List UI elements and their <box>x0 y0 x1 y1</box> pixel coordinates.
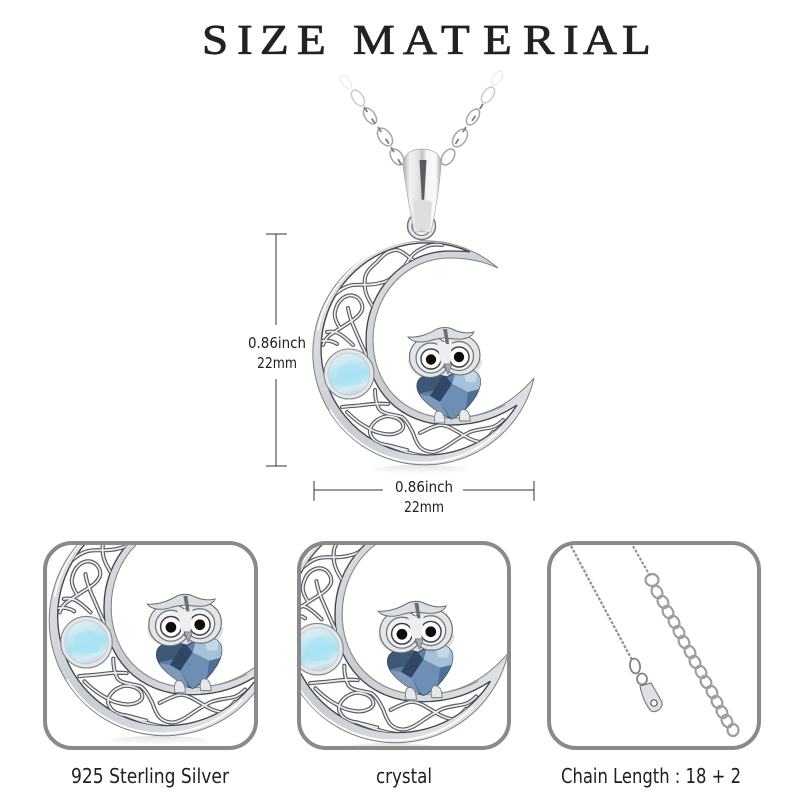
horizontal dimension: 22mm <box>404 498 444 516</box>
vertical dimension: 0.86inch <box>248 334 306 352</box>
vertical dimension <box>248 234 306 466</box>
panel: crystal detail <box>297 541 511 750</box>
pendant: crescent moon with owl <box>313 149 534 475</box>
title: SIZE MATERIAL <box>202 16 651 63</box>
horizontal dimension <box>314 478 534 516</box>
caption: crystal: crystal <box>376 764 432 788</box>
caption: material: 925 Sterling Silver <box>71 764 230 788</box>
panel: chain detail <box>549 543 759 748</box>
horizontal dimension: 0.86inch <box>395 478 453 496</box>
panel: 925 sterling silver detail <box>43 541 258 750</box>
caption: chain length: Chain Length : 18 + 2 <box>561 764 741 788</box>
vertical dimension: 22mm <box>257 354 297 372</box>
necklace chain <box>338 69 505 168</box>
